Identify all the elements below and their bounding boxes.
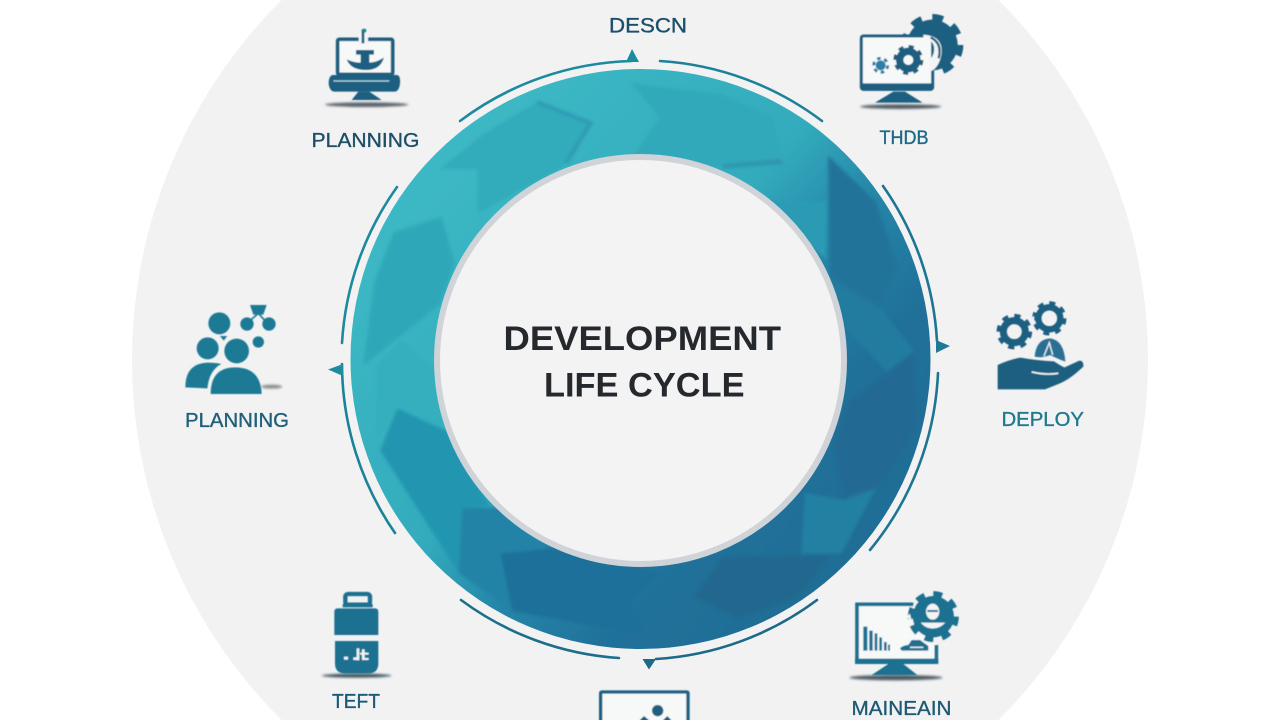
background disc — [132, 0, 1148, 720]
label: test: TEFT — [332, 691, 380, 713]
infographic: development life cycle — [132, 0, 1148, 720]
cycle ring with arrow segments — [350, 69, 930, 649]
arrow: right — [936, 340, 950, 353]
arrow: left — [328, 364, 343, 376]
label: deploy: DEPLOY — [1002, 409, 1084, 431]
icon: people with network — [185, 305, 282, 394]
label: THDB: THDB — [880, 127, 928, 149]
icon: planning monitor — [325, 29, 408, 107]
center title: LIFE CYCLE — [544, 366, 744, 404]
label: design: DESCN — [609, 14, 687, 38]
arrow: top — [626, 49, 639, 62]
label: planning left: PLANNING — [185, 410, 289, 432]
icon: maintain monitor — [849, 594, 956, 680]
outer cycle arcs — [342, 61, 938, 659]
label: planning top: PLANNING — [312, 129, 420, 152]
icon: monitor with gears — [860, 17, 960, 109]
arrow: bottom — [642, 659, 656, 670]
icon: test canister — [322, 594, 391, 678]
icon: hand with gears — [998, 303, 1083, 389]
center title — [504, 320, 781, 404]
center disc — [437, 157, 844, 564]
center title: DEVELOPMENT — [504, 320, 781, 358]
label: maintain: MAINEAIN — [852, 698, 952, 720]
icon: bottom monitor — [601, 692, 688, 720]
